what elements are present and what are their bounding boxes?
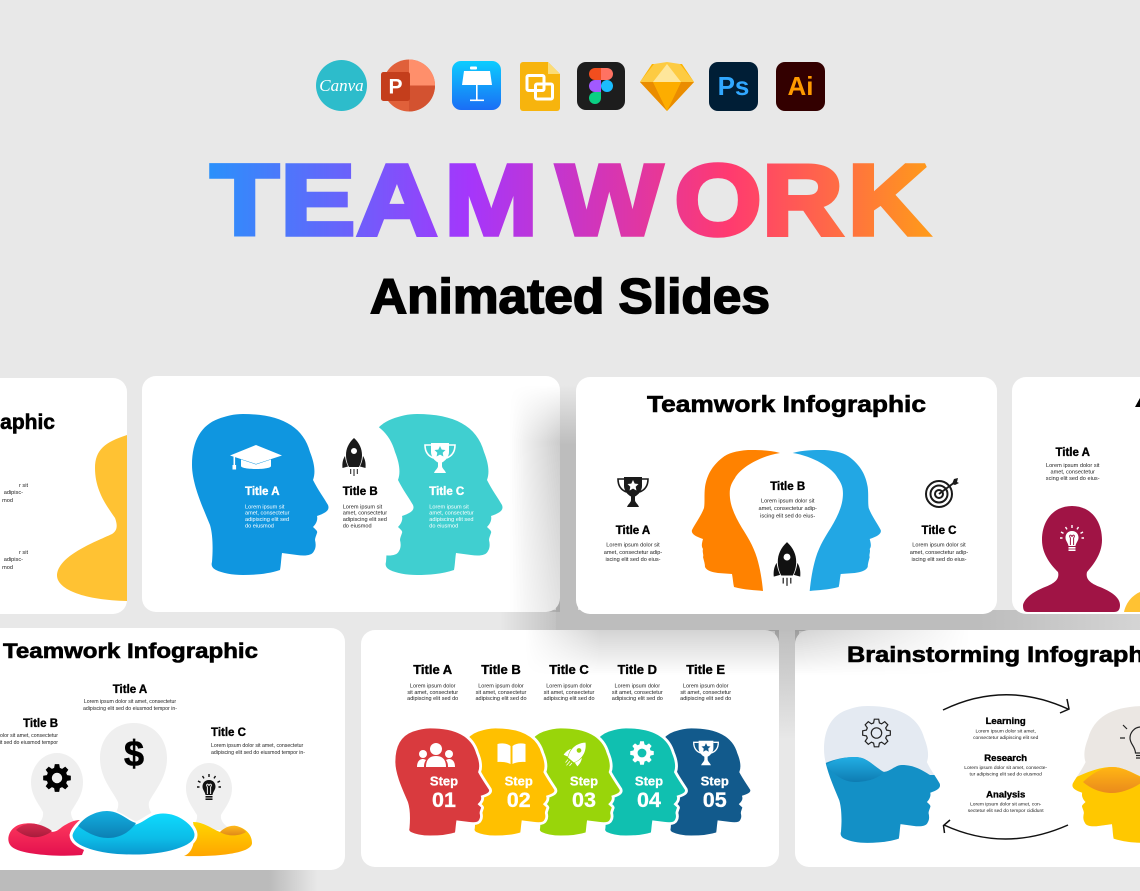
Analysis text: Lorem ipsum dolor sit amet, con-	[970, 802, 1042, 808]
Title C text	[910, 525, 968, 563]
icon: gear outline	[863, 719, 890, 747]
right head	[1072, 706, 1140, 843]
Title C text	[429, 486, 474, 530]
Title A text: adipiscing elit sed do eiusmod tempor in-	[83, 706, 177, 712]
icon: bulb outline	[1120, 718, 1140, 758]
maroon person	[1023, 506, 1120, 612]
head 01	[394, 727, 491, 837]
left head	[824, 706, 940, 843]
yellow blob	[184, 822, 252, 856]
yellow person partial	[1124, 592, 1140, 612]
title: TEAMWORK	[211, 145, 929, 256]
column titles and text: Title E	[686, 662, 725, 677]
column titles and text: Title B	[481, 662, 521, 677]
step labels: Step	[701, 774, 729, 789]
Title B text: Title B	[770, 481, 805, 493]
column titles and text: adipiscing elit sed do	[543, 696, 595, 702]
Title A text: Title A	[616, 525, 650, 537]
Title C text: Lorem ipsum dolor sit amet, consectetur	[211, 743, 304, 749]
column titles and text: Title D	[618, 662, 657, 677]
Title A text: iscing elit sed do eius-	[605, 557, 661, 563]
Title C text: adipiscing elit sed	[429, 517, 473, 523]
arrow: top	[943, 695, 1069, 713]
icon: Sketch	[640, 62, 694, 111]
icon: gear	[43, 764, 71, 792]
Title B text: amet, consectetur adip-	[758, 506, 817, 512]
Learning text: Learning	[986, 716, 1026, 727]
partial text block upper	[2, 483, 28, 504]
blue blob	[71, 811, 196, 856]
panel: far-left partial slide	[0, 378, 127, 614]
icon: rocket	[342, 438, 366, 476]
panel: far-right partial slide	[1012, 377, 1140, 614]
Title A text: Title A	[245, 486, 280, 498]
Title A text: amet, consectetur adip-	[604, 550, 662, 556]
Title B text: adipiscing elit sed	[343, 517, 387, 523]
Title B text	[0, 718, 58, 746]
Title B text: iscing elit sed do eius-	[760, 514, 815, 520]
heading: Teamwork Infographic	[3, 640, 258, 663]
arrow: bottom	[944, 820, 1068, 839]
Title C text	[211, 727, 305, 756]
Title C text: amet, consectetur adip-	[910, 550, 968, 556]
Title A text: Lorem ipsum sit	[245, 504, 285, 510]
icon: bulb	[197, 774, 221, 800]
yellow person silhouette	[57, 435, 127, 601]
column titles and text: Lorem ipsum dolor	[615, 684, 660, 690]
step labels: Step	[570, 774, 598, 789]
icon: people	[417, 743, 455, 767]
Title C text: amet, consectetur	[429, 511, 474, 517]
Title A text: Title A	[1055, 447, 1090, 459]
head 02	[459, 727, 556, 837]
icon: Canva	[316, 60, 367, 111]
Title A text	[1046, 447, 1100, 482]
Title A text	[83, 684, 177, 712]
step labels: 05	[703, 788, 727, 812]
shadow overlay	[518, 394, 560, 612]
Title C text: Title C	[922, 525, 956, 537]
icon: Figma	[577, 62, 625, 110]
Title B text: Lorem ipsum dolor sit	[761, 499, 815, 505]
panel: teamwork two heads	[576, 377, 997, 614]
Title C text: iscing elit sed do eius-	[911, 557, 967, 563]
Title B text	[343, 486, 387, 530]
Title A text: scing elit sed do eius-	[1046, 476, 1100, 482]
step labels: Step	[505, 774, 533, 789]
gray head C	[186, 763, 232, 830]
Title B text: do eiusmod	[343, 524, 372, 530]
icon: Photoshop	[709, 62, 758, 111]
column titles and text: Lorem ipsum dolor	[546, 684, 592, 690]
Title C text: Title C	[211, 727, 246, 739]
step labels: Step	[430, 774, 458, 789]
column titles and text: sit amet, consectetur	[680, 690, 731, 696]
gray head B	[30, 753, 85, 830]
Title C text: Title C	[429, 486, 464, 498]
blue head	[793, 450, 881, 591]
icon: Illustrator	[776, 62, 825, 111]
head 05	[655, 727, 752, 837]
icon: trophy	[694, 741, 718, 765]
Learning text: Lorem ipsum dolor sit amet,	[976, 728, 1036, 734]
Title B text: Title B	[343, 486, 378, 498]
partial text block lower	[2, 550, 28, 571]
heading: Teamwork Infographic	[647, 391, 926, 417]
step labels: 04	[637, 788, 661, 812]
icon: Google Slides	[520, 62, 560, 111]
head B white cut-out	[277, 414, 414, 575]
head C	[366, 414, 503, 575]
red blob	[8, 820, 90, 856]
icon: rocket	[560, 737, 592, 771]
step labels: Step	[635, 774, 663, 789]
icon: PowerPoint	[381, 60, 435, 112]
Title C text: Lorem ipsum sit	[429, 504, 469, 510]
icon: bulb	[1060, 525, 1084, 551]
Title A text	[604, 525, 662, 563]
dollar icon: $	[124, 733, 144, 774]
panel: three heads	[142, 376, 560, 612]
icon: Canva: Canva	[319, 76, 364, 95]
Learning text: consectetur adipiscing elit sed	[973, 735, 1039, 741]
Analysis text	[968, 790, 1044, 814]
column titles and text: Lorem ipsum dolor	[410, 684, 456, 690]
step labels: 03	[572, 788, 596, 812]
Title B text: Lorem ipsum sit	[343, 504, 383, 510]
column titles and text: Title A	[413, 662, 453, 677]
Title A text: Lorem ipsum dolor sit	[1046, 463, 1100, 469]
head A	[192, 414, 329, 575]
Title A text: amet, consectetur	[1050, 470, 1095, 476]
icon: rocket	[774, 542, 800, 586]
icon row: app logos	[316, 60, 825, 112]
icon: Photoshop: Ps	[718, 71, 749, 101]
icon: Illustrator: Ai	[788, 71, 814, 101]
step labels: 01	[432, 788, 456, 812]
column titles and text: sit amet, consectetur	[407, 690, 458, 696]
column titles and text: Lorem ipsum dolor	[683, 684, 729, 690]
column titles and text: adipiscing elit sed do	[475, 696, 527, 702]
Research text	[964, 753, 1048, 778]
Title A text: Lorem ipsum dolor sit	[606, 543, 660, 549]
icon: trophy	[618, 477, 648, 507]
Title A text: amet, consectetur	[245, 511, 290, 517]
Title A text: adipiscing elit sed	[245, 517, 289, 523]
Analysis text: sectetur elit sed do tempor cididunt	[968, 808, 1044, 814]
gray head A	[100, 723, 167, 826]
column titles and text: sit amet, consectetur	[476, 690, 527, 696]
Research text: Lorem ipsum dolor sit amet, consecte-	[964, 765, 1048, 771]
partial text block upper: adipisc-	[4, 490, 23, 496]
icon: target	[926, 478, 959, 507]
column titles and text: adipiscing elit sed do	[407, 696, 458, 702]
subtitle: Animated Slides	[370, 270, 770, 324]
Title A text: Lorem ipsum dolor sit amet, consectetur	[84, 699, 176, 705]
Research text: Research	[984, 753, 1027, 764]
head 03	[525, 727, 621, 837]
Analysis text: Analysis	[986, 790, 1025, 800]
partial text block lower: mod	[2, 565, 13, 571]
Title A text: do eiusmod	[245, 524, 274, 530]
partial text block upper: mod	[2, 498, 13, 504]
column titles and text: adipiscing elit sed do	[612, 696, 663, 702]
partial heading: aphic	[0, 411, 55, 434]
column titles and text	[407, 662, 731, 702]
Research text: tur adipiscing elit sed do eiusmod	[970, 772, 1042, 778]
partial text block lower: adipisc-	[4, 557, 23, 563]
icon: gear	[630, 741, 654, 765]
icon: book	[498, 743, 526, 764]
Title A text: Title A	[113, 684, 147, 696]
Title C text: Lorem ipsum dolor sit	[912, 543, 966, 549]
step labels	[430, 774, 729, 812]
partial text block upper: r sit	[19, 483, 28, 489]
icon: PowerPoint: P	[388, 76, 403, 98]
Learning text	[973, 716, 1039, 741]
Title B text: Title B	[23, 718, 58, 730]
panel: brainstorming	[795, 630, 1140, 867]
Title B text	[758, 481, 817, 520]
Title C text: do eiusmod	[429, 524, 458, 530]
icon: trophy	[425, 443, 455, 473]
Title C text: adipiscing elit sed do eiusmod tempor in-	[211, 750, 305, 756]
partial heading glyph	[1135, 398, 1140, 407]
icon: Keynote	[452, 61, 501, 110]
Title A text	[245, 486, 290, 530]
column titles and text: sit amet, consectetur	[612, 690, 663, 696]
column titles and text: Lorem ipsum dolor	[478, 684, 524, 690]
drop shadows behind panels	[0, 380, 1140, 891]
step labels: 02	[507, 788, 531, 812]
partial text block lower: r sit	[19, 550, 28, 556]
heading: Brainstorming Infographic	[847, 642, 1140, 667]
column titles and text: sit amet, consectetur	[544, 690, 595, 696]
column titles and text: adipiscing elit sed do	[680, 696, 731, 702]
orange head	[692, 450, 780, 591]
icon: graduation cap	[230, 445, 282, 470]
Title B text: amet, consectetur	[343, 511, 387, 517]
panel: five steps	[361, 630, 779, 867]
panel: team people	[0, 628, 345, 870]
head 04	[590, 727, 686, 837]
column titles and text: Title C	[549, 662, 589, 677]
